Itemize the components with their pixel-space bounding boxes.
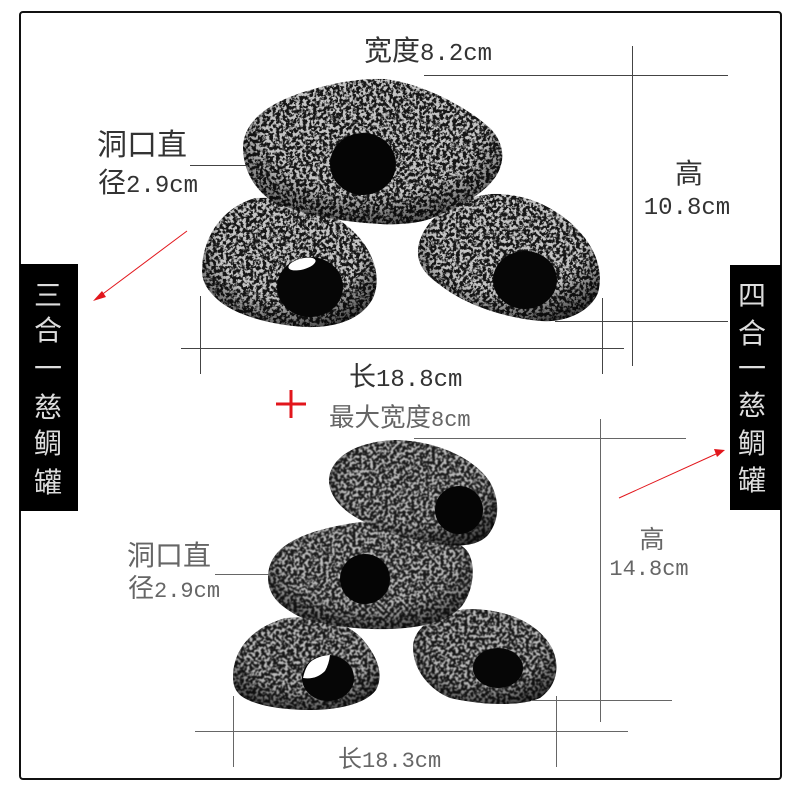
side tag: four-in-one: 四 (738, 274, 766, 314)
arrow: to four-in-one tag (619, 449, 725, 498)
label: width 8.2cm: 宽度8.2cm (364, 29, 492, 69)
product: three-in-one stone stack (202, 79, 600, 327)
dimension lines: four-in-one (195, 419, 686, 767)
arrow: to three-in-one tag (93, 231, 187, 301)
plus sign (276, 390, 306, 418)
stone: top (243, 79, 502, 224)
stone: bottom right (413, 609, 556, 704)
product: four-in-one stone stack (233, 440, 556, 710)
side tag: three-in-one: 合 (34, 309, 62, 349)
side tag: three-in-one: 慈 (34, 386, 62, 426)
stone: bottom left (233, 617, 380, 710)
label: max width 8cm: 最大宽度8cm (329, 397, 471, 434)
side tag: four-in-one: 一 (738, 347, 766, 387)
label: height 14.8cm: 高 (639, 520, 665, 556)
dimension lines: three-in-one (181, 46, 728, 374)
stone: lower right (418, 194, 600, 321)
label: hole diameter, three-in-one: 洞口直 (97, 120, 187, 164)
label: height value 10.8cm: 10.8cm (644, 195, 730, 222)
label: hole diameter, four-in-one: 洞口直 (127, 534, 211, 574)
side tag: three-in-one: 鲷 (34, 422, 62, 462)
side tag: four-in-one: 鲷 (738, 422, 766, 462)
label: height value 14.8cm: 14.8cm (609, 557, 689, 582)
label: hole diameter value, three-in-one: 径2.9cm (98, 161, 198, 201)
stone: middle (268, 521, 473, 629)
side tag: three-in-one (20, 264, 78, 511)
side tag: four-in-one: 慈 (738, 384, 766, 424)
side tag: four-in-one: 合 (738, 312, 766, 352)
label: height 10.8cm: 高 (675, 152, 703, 192)
stone: lower left (202, 198, 377, 327)
side tag: three-in-one: 三 (34, 274, 62, 314)
stone: top (329, 440, 497, 545)
label: length 18.3cm: 长18.3cm (338, 739, 441, 774)
side tag: three-in-one: 一 (34, 347, 62, 387)
label: hole diameter value, four-in-one: 径2.9cm (128, 568, 220, 605)
label: length 18.8cm: 长18.8cm (349, 355, 462, 394)
side tag: three-in-one: 罐 (34, 461, 62, 501)
side tag: four-in-one (730, 265, 781, 510)
side tag: four-in-one: 罐 (738, 459, 766, 499)
